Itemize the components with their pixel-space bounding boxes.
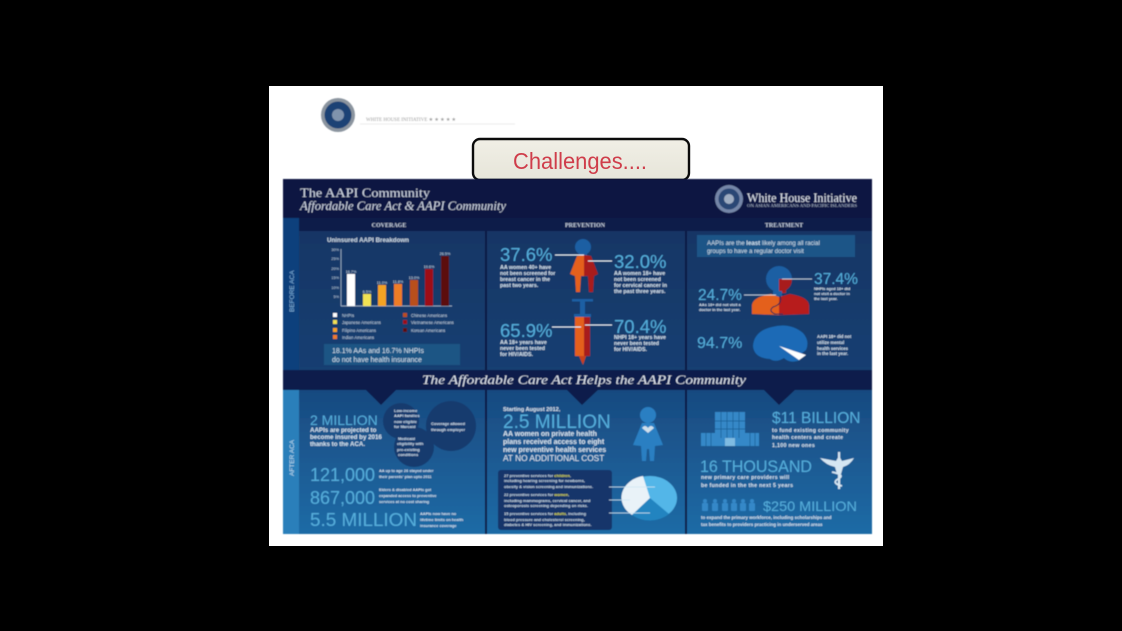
column heading band: PREVENTION — [565, 223, 606, 229]
benefit bubbles — [383, 401, 476, 467]
benefit bubbles: now eligible — [394, 419, 418, 424]
preventive services list: osteoporosis screening depending on risks. — [504, 503, 588, 508]
stat: 70.4% — [614, 316, 666, 353]
benefit bubbles: Low-income — [394, 408, 418, 413]
stat: 94.7%: 94.7% — [697, 335, 742, 352]
benefit bubbles: pre-existing — [397, 447, 420, 452]
stat: 70.4%: for HIV/AIDS. — [614, 347, 647, 353]
stat: 65.9%: for HIV/AIDS. — [500, 352, 533, 358]
column heading band — [299, 218, 872, 231]
stat: 2.5 million: plans received access to eight — [503, 439, 605, 446]
benefit bubbles: Coverage allowed — [431, 421, 466, 426]
stat: 37.6%: AA women 40+ have — [500, 265, 551, 271]
stat: 16 thousand: 16 THOUSAND — [700, 458, 812, 476]
panel: coverage — [299, 231, 485, 370]
banner: Affordable Care Act heading with arrows: The Affordable Care Act Helps the AAPI Community — [422, 372, 746, 387]
stat: 37.4% — [814, 271, 858, 301]
stat: 867,000: 867,000 — [310, 488, 375, 508]
stat: 32.0%: for cervical cancer in — [614, 283, 667, 289]
preventive services list: including mammograms, cervical cancer, and — [504, 498, 591, 503]
bar chart: 10% — [331, 286, 340, 290]
stat: 32.0%: the past three years. — [614, 289, 666, 295]
stat: 32.0%: AA women 18+ have — [614, 271, 665, 277]
chart heading: Uninsured AAPI Breakdown — [327, 237, 409, 244]
stat: 867,000: expanded access to preventive — [379, 493, 437, 498]
column heading band: COVERAGE — [372, 223, 406, 229]
stat: 2.5 million: AT NO ADDITIONAL COST — [503, 453, 604, 463]
stat: 867,000: services at no cost sharing — [379, 499, 430, 504]
stat: 37.6%: past two years. — [500, 283, 539, 289]
bar chart: 26.5% — [440, 252, 451, 256]
mental health text: AAPI 18+ did not — [817, 334, 852, 339]
panel: after coverage — [299, 390, 485, 534]
bar chart — [331, 248, 452, 306]
treatment callout: AAPIs are the least likely among all racial — [707, 240, 820, 247]
benefit bubbles: conditions — [398, 452, 419, 457]
stat: $250 million: $250 MILLION — [763, 498, 857, 514]
benefit bubbles: Medicaid — [398, 436, 416, 441]
icon: hospital building — [701, 412, 759, 446]
stat: 24.7%: doctor in the last year. — [699, 307, 740, 312]
stat: 37.4%: the last year. — [814, 296, 838, 301]
icon: syringe with percent scale — [552, 299, 612, 365]
slide logo: seal and faint title line — [321, 98, 515, 132]
stat: 867,000 — [310, 487, 437, 508]
coverage callout: 18.1% AAs and 16.7% NHPIs — [332, 348, 424, 355]
preventive services list: obesity & vision screening and immunizations. — [504, 484, 593, 489]
stat: 2.5 million: Starting August 2012, — [503, 407, 561, 413]
stat: 867,000: Elders & disabled AAPIs got — [379, 487, 432, 492]
preventive services list: 27 preventive services for children, — [504, 473, 571, 478]
bar chart: 13.0% — [409, 276, 420, 280]
slide logo: seal and faint title line: WHITE HOUSE INITIATIVE ★ ★ ★ ★ ★ — [366, 117, 457, 123]
preventive services list — [498, 470, 612, 530]
bar chart: 20% — [331, 267, 340, 271]
stat: $11 billion: 1,100 new ones — [772, 443, 815, 449]
stat: 24.7% — [698, 287, 742, 312]
infographic — [283, 179, 872, 534]
stat: 37.6%: breast cancer in the — [500, 277, 550, 283]
stat: 121,000: 121,000 — [310, 465, 375, 485]
stat: 16 thousand — [700, 458, 812, 489]
stat: 121,000: their parents' plan upto 2011 — [379, 474, 432, 479]
bar chart: 5% — [334, 295, 340, 299]
icon: woman with heart — [633, 407, 663, 461]
side label: after ACA — [283, 390, 299, 534]
stat: 2 million: 2 MILLION — [310, 412, 378, 428]
stat: 70.4%: never been tested — [614, 341, 659, 347]
stat: 2 million: AAPIs are projected to — [310, 427, 377, 434]
stat: 24.7%: AAs 18+ did not visit a — [699, 302, 741, 307]
column heading band: TREATMENT — [765, 223, 803, 229]
icon: woman figure with percent scale — [555, 239, 612, 292]
bar chart: 15% — [331, 276, 340, 280]
stat: $11 billion: to fund existing community — [772, 428, 849, 434]
stat: 70.4%: NHPI 18+ years have — [614, 335, 666, 341]
callout: Challenges button — [473, 139, 689, 180]
mental health text: utilize mental — [817, 340, 844, 345]
mental health text: health services — [817, 346, 849, 351]
stat: 32.0% — [614, 251, 667, 295]
side label: after ACA: AFTER ACA — [289, 439, 296, 476]
benefit bubbles: through employer — [431, 427, 465, 432]
bar chart: 11.0% — [377, 281, 388, 285]
stat: 65.9%: never been tested — [500, 346, 545, 352]
bar chart: 25% — [331, 257, 340, 261]
stat: 121,000: AA up to age 26 stayed under — [379, 468, 434, 473]
stat: 32.0%: 32.0% — [614, 251, 666, 272]
stat: 121,000 — [310, 465, 434, 485]
header title: Affordable Care Act & AAPI Community — [299, 199, 506, 213]
treatment callout: groups to have a regular doctor visit — [707, 248, 804, 255]
coverage callout — [324, 344, 460, 365]
side label: before ACA: BEFORE ACA — [289, 270, 296, 312]
header seal and White House Initiative wordmark: ON ASIAN AMERICANS AND PACIFIC ISLANDERS — [747, 203, 857, 208]
treatment callout — [697, 235, 855, 257]
benefit bubbles: for Marcaid — [394, 424, 416, 429]
stat: 70.4%: 70.4% — [614, 316, 666, 337]
stat: 37.4%: NHPIs aged 18+ did — [814, 286, 851, 291]
stat: 65.9%: AA 18+ years have — [500, 340, 547, 346]
chart legend: Chinese Americans — [411, 313, 447, 318]
icon: row of people — [702, 499, 755, 511]
panel: after treatment — [687, 390, 872, 534]
stat: 5.5 million: AAPIs now have no — [420, 511, 457, 516]
icon: person with stethoscope — [744, 266, 812, 315]
slide background — [269, 86, 883, 546]
chart legend — [333, 313, 454, 340]
chart legend: Filipino Americans — [342, 328, 376, 333]
chart legend: Vietnamese Americans — [411, 320, 454, 325]
stat: 65.9% — [500, 320, 552, 358]
bar chart: 6.5% — [363, 290, 372, 294]
pie chart with leader lines — [609, 476, 677, 520]
bar chart: 11.8% — [393, 280, 404, 284]
icon: brain with highlighted slice — [753, 325, 807, 362]
side label: before ACA — [283, 218, 299, 370]
benefit bubbles: eligibility with — [397, 441, 424, 446]
stat: 65.9%: 65.9% — [500, 320, 552, 341]
stat: 24.7%: 24.7% — [698, 287, 742, 304]
preventive services list: 22 preventive services for women, — [504, 492, 569, 497]
stat: $250 million: to expand the primary workforce, including scholarships and — [701, 515, 832, 520]
stat: 2.5 million: AA women on private health — [503, 431, 597, 438]
stat: 37.6%: not been screened for — [500, 271, 555, 277]
stat: $250 million: tax benefits to providers practicing in underserved areas — [701, 522, 823, 527]
benefit bubbles: AAPI families — [394, 413, 420, 418]
chart legend: Japanese Americans — [342, 320, 381, 325]
stat: 37.4%: 37.4% — [814, 271, 858, 288]
chart legend: NHPIs — [342, 313, 354, 318]
chart legend: Korean Americans — [411, 328, 445, 333]
stat: 32.0%: not been screened — [614, 277, 661, 283]
header title: The AAPI Community — [300, 186, 431, 200]
stat: $11 billion: $11 BILLION — [772, 410, 860, 427]
chart legend: Indian Americans — [342, 335, 374, 340]
stat: $11 billion: health centers and create — [772, 435, 843, 441]
coverage callout: do not have health insurance — [332, 357, 422, 364]
bar chart: 16.7% — [346, 270, 357, 274]
preventive services list: 15 preventive services for adults, including — [504, 511, 587, 516]
stat: $250 million — [701, 498, 857, 527]
bar chart: 30% — [331, 248, 340, 252]
preventive services list: including hearing screening for newborns, — [504, 478, 585, 483]
preventive services list: blood pressure and cholesterol screening, — [504, 517, 585, 522]
header seal and White House Initiative wordmark: White House Initiative — [747, 191, 857, 205]
stat: 5.5 million — [310, 509, 464, 530]
stat: $11 billion — [772, 410, 860, 449]
icon: caduceus — [820, 452, 854, 489]
callout: Challenges button: Challenges.... — [513, 148, 647, 174]
stat: 5.5 million: insurance coverage — [420, 523, 457, 528]
preventive services list: diabetes & HIV screening, and immunizations. — [504, 522, 592, 527]
bar chart: 19.6% — [424, 265, 435, 269]
banner: Affordable Care Act heading with arrows — [283, 370, 872, 405]
mental health text: in the last year. — [817, 351, 848, 356]
stat: 37.4%: not visit a doctor in — [814, 291, 851, 296]
stat: 2.5 million: 2.5 MILLION — [503, 412, 611, 433]
stat: 16 thousand: new primary care providers will — [701, 475, 790, 481]
header seal and White House Initiative wordmark — [715, 185, 857, 213]
stat: 37.6%: 37.6% — [500, 244, 552, 265]
stat: 5.5 million: lifetime limits on health — [420, 517, 464, 522]
header title — [299, 186, 506, 213]
panel: treatment — [687, 231, 872, 370]
panel: after prevention — [487, 390, 685, 534]
stat: 2.5 million — [503, 407, 611, 463]
stat: 5.5 million: 5.5 MILLION — [310, 509, 417, 530]
stat: 2 million — [310, 412, 382, 448]
mental health text — [817, 334, 852, 356]
stat: 2.5 million: new preventive health services — [503, 447, 606, 454]
stat: 2 million: thanks to the ACA. — [310, 441, 365, 448]
stat: 37.6% — [500, 244, 555, 289]
panel: prevention — [487, 231, 685, 370]
stat: 2 million: become insured by 2016 — [310, 434, 382, 441]
stat: 16 thousand: be funded in the the next 5 years — [701, 483, 793, 489]
